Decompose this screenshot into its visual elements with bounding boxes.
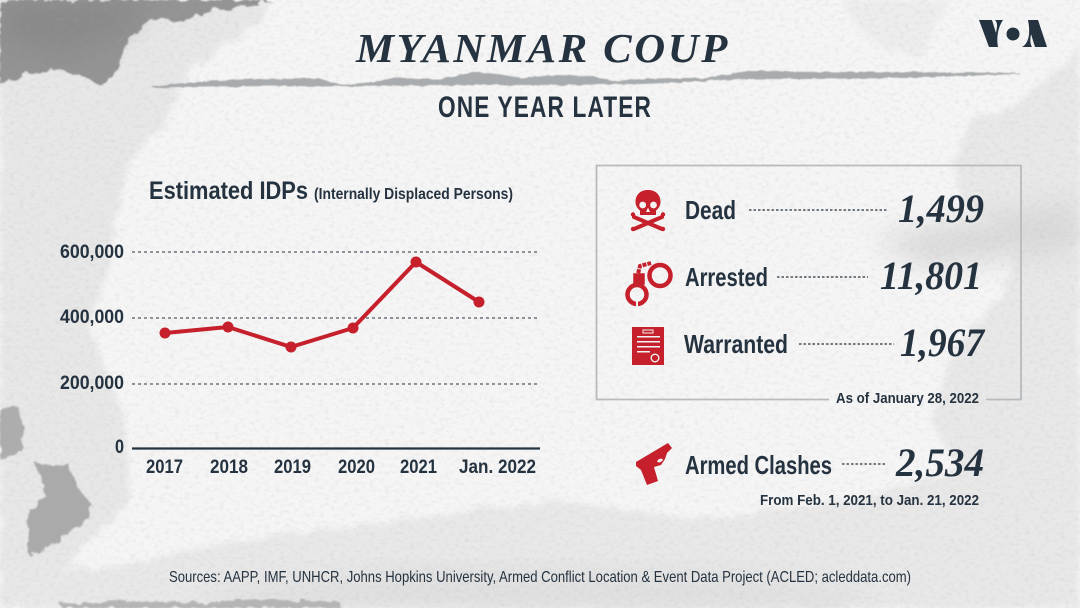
x axis labels: 2020 (338, 457, 375, 478)
y axis labels (60, 242, 124, 458)
chart heading (149, 177, 513, 205)
label: warranted: Warranted (684, 329, 788, 359)
sources: Sources: AAPP, IMF, UNHCR, Johns Hopkins University, Armed Conflict Location & Event Data Project (ACLED; acleddata.com) (169, 569, 911, 586)
icon: handgun (636, 443, 672, 485)
panel: casualty statistics (596, 166, 1021, 407)
icon: skull and crossbones (631, 190, 665, 231)
label: dead: Dead (685, 195, 736, 225)
y axis labels: 200,000 (60, 373, 124, 394)
chart heading: (Internally Displaced Persons) (314, 186, 513, 203)
x axis labels: 2021 (400, 457, 437, 478)
data line (160, 256, 484, 352)
x axis labels: 2019 (274, 457, 311, 478)
subtitle: ONE YEAR LATER (438, 91, 652, 124)
value: dead: 1,499 (898, 186, 984, 231)
x axis labels: Jan. 2022 (459, 457, 536, 478)
value: warranted: 1,967 (900, 320, 986, 365)
VOA logo (979, 20, 1047, 47)
x axis labels (146, 457, 536, 478)
label: armed clashes: Armed Clashes (685, 450, 832, 480)
label: arrested: Arrested (685, 262, 768, 292)
icon: warrant document (632, 327, 664, 365)
y axis labels: 400,000 (60, 307, 124, 328)
title: MYANMAR COUP (355, 25, 730, 71)
date note: As of January 28, 2022 (836, 390, 979, 407)
torn paper divider (153, 71, 1020, 88)
value: arrested: 11,801 (880, 253, 982, 298)
y axis labels: 0 (115, 437, 124, 458)
value: armed clashes: 2,534 (895, 440, 984, 485)
line chart: estimated IDPs (60, 177, 540, 478)
x axis labels: 2018 (210, 457, 248, 478)
armed clashes statistic (636, 440, 984, 509)
chart heading: Estimated IDPs (149, 177, 308, 205)
y axis labels: 600,000 (60, 242, 124, 263)
date range note: From Feb. 1, 2021, to Jan. 21, 2022 (760, 492, 979, 509)
icon: handcuffs (628, 263, 670, 308)
x axis labels: 2017 (146, 457, 183, 478)
